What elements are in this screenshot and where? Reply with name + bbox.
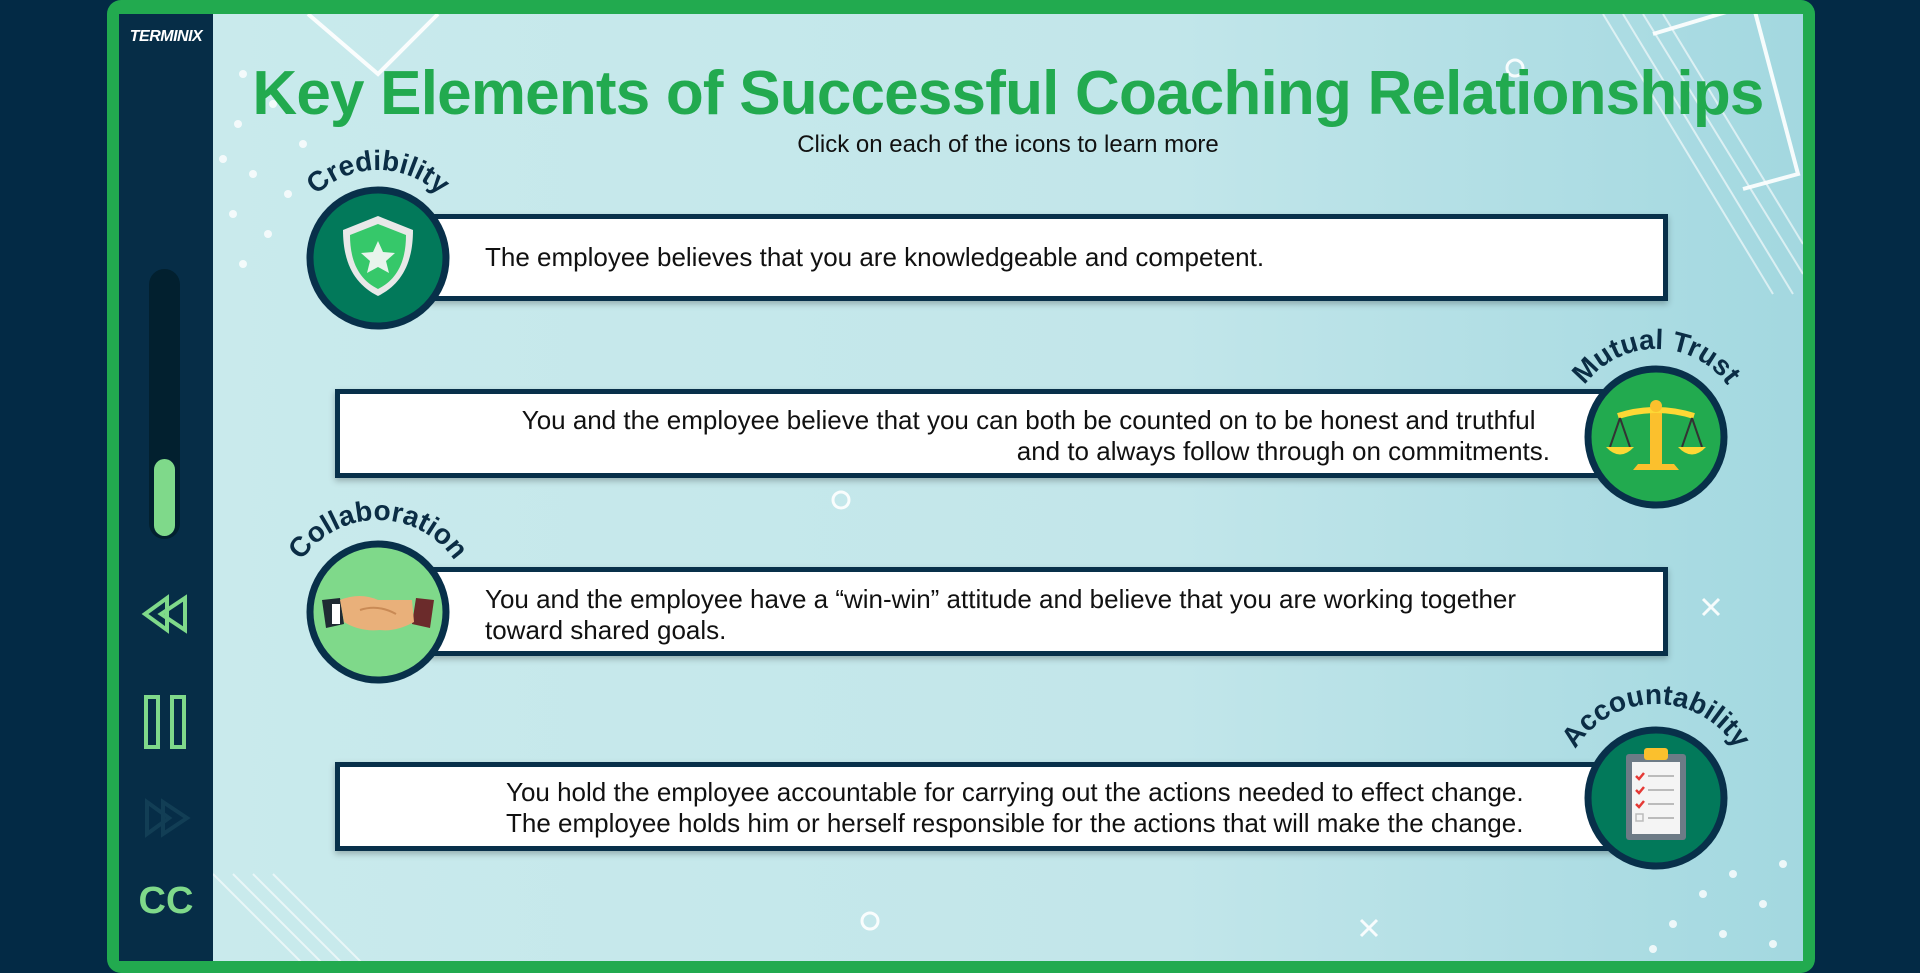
text box (335, 762, 1616, 851)
icon: shield (306, 150, 450, 330)
icon: handshake: Collaboration (290, 501, 464, 560)
text (506, 777, 1524, 838)
text box (429, 214, 1668, 301)
text: and to always follow through on commitments. (1017, 436, 1550, 466)
panel: mutual trust (332, 328, 1740, 508)
panel: accountability (332, 686, 1748, 870)
text box (429, 567, 1668, 656)
panel: collaboration (290, 501, 1671, 684)
icon: rewind (142, 594, 187, 634)
panel: credibility (306, 150, 1671, 330)
text (522, 405, 1550, 466)
icon: scales (1571, 328, 1740, 508)
text (485, 584, 1516, 645)
icon: CC: CC (139, 880, 193, 922)
text: You and the employee believe that you can both be counted on to be honest and truthful (522, 405, 1536, 435)
text: The employee believes that you are knowledgeable and competent. (485, 242, 1264, 272)
text: You hold the employee accountable for carrying out the actions needed to effect change. (506, 777, 1524, 807)
text: toward shared goals. (485, 615, 726, 645)
text: You and the employee have a “win-win” attitude and believe that you are working together (485, 584, 1516, 614)
text: The employee holds him or herself responsible for the actions that will make the change. (506, 808, 1523, 838)
text box (335, 389, 1616, 478)
icon: pause (144, 695, 186, 749)
icon: shield: Credibility (308, 150, 450, 194)
subtitle: Click on each of the icons to learn more (797, 131, 1219, 158)
logo: TERMINIX (130, 28, 202, 45)
icon: handshake (290, 501, 464, 684)
icon: clipboard (1564, 686, 1748, 870)
slider (149, 269, 180, 539)
icon: scales: Mutual Trust (1571, 328, 1740, 386)
sidebar (119, 14, 213, 961)
title: Key Elements of Successful Coaching Relationships (252, 59, 1764, 128)
icon: forward (145, 798, 190, 838)
icon: clipboard: Accountability (1564, 686, 1748, 749)
